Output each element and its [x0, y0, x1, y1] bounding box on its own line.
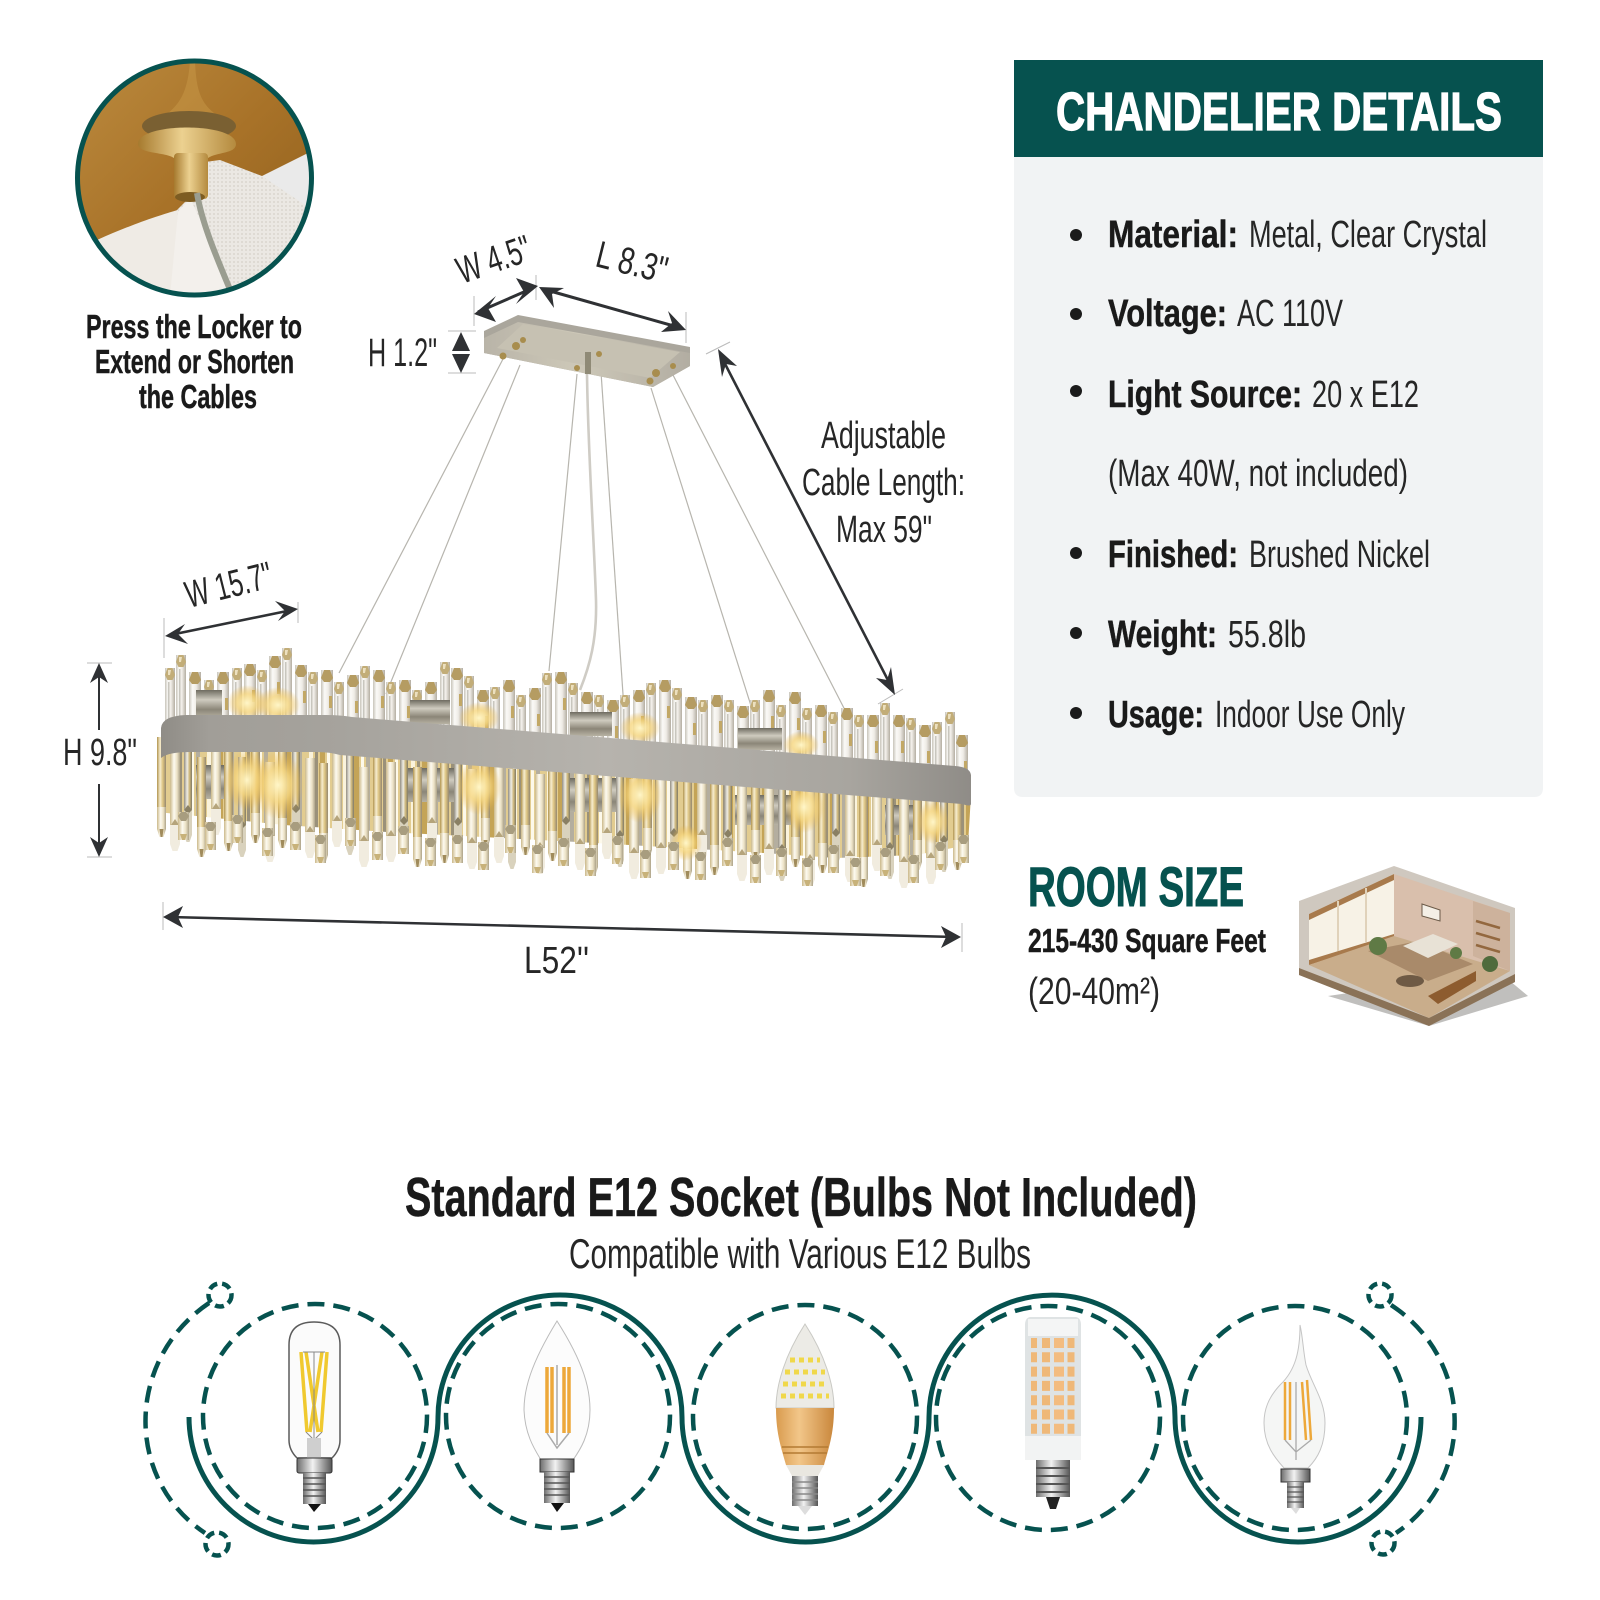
room size text: 215-430 Square Feet — [1028, 922, 1266, 959]
dimension: W 4.5 — [451, 228, 538, 326]
bullet list: Finished: — [1108, 534, 1238, 576]
bullet list: 20 x E12 — [1312, 374, 1419, 416]
nickel drums below band — [196, 765, 919, 835]
photo: cable locker detail — [78, 60, 318, 300]
caption: press the locker: Extend or Shorten — [95, 343, 294, 380]
dimension: L52 — [163, 902, 962, 982]
room size text: ROOM SIZE — [1028, 855, 1244, 918]
label: adjustable cable length: Max 59" — [836, 509, 932, 551]
dimension: L 8.3 — [539, 234, 686, 343]
lower lights — [225, 750, 949, 861]
bullet list: 55.8lb — [1228, 614, 1306, 656]
bullet list: Brushed Nickel — [1249, 534, 1430, 576]
caption: press the locker: the Cables — [139, 378, 257, 415]
dimension: W 4.5: W 4.5" — [451, 228, 537, 293]
label: adjustable cable length: Adjustable — [821, 415, 946, 457]
icon: flame-tip bulb — [1264, 1325, 1325, 1514]
panel header bar — [1014, 60, 1543, 157]
icon: tubular T6 bulb — [289, 1322, 340, 1512]
chandelier — [157, 648, 971, 888]
caption: press the locker — [86, 308, 302, 415]
icon: corn LED bulb — [1025, 1317, 1081, 1509]
room size text — [1028, 855, 1266, 1013]
bullet list: Material: — [1108, 214, 1238, 256]
chandelier canopy — [484, 315, 690, 387]
crystals below band — [157, 735, 962, 888]
bullet list: Indoor Use Only — [1215, 694, 1405, 736]
metal band — [161, 715, 971, 806]
bullet list: Voltage: — [1108, 293, 1227, 335]
panel background — [1014, 157, 1543, 797]
icon: clear candle bulb — [524, 1321, 590, 1512]
icon: isometric room — [1299, 866, 1528, 1026]
dimension: H 9.8 — [63, 663, 137, 857]
panel: chandelier details — [1014, 60, 1543, 797]
bullet list — [1070, 214, 1487, 736]
caption: press the locker: Press the Locker to — [86, 308, 302, 345]
upper nickel drums and lights — [196, 685, 819, 759]
dimension: W 15.7 — [164, 555, 298, 658]
dimension: W 15.7: W 15.7" — [181, 555, 277, 617]
crystal tips — [178, 812, 969, 886]
subheading: compatible bulbs: Compatible with Various E12 Bulbs — [569, 1230, 1031, 1277]
decorative bulb ring frame — [145, 1284, 1455, 1556]
room size text: (20-40m²) — [1028, 971, 1160, 1013]
bullet list: (Max 40W, not included) — [1108, 453, 1408, 495]
heading: standard E12 socket: Standard E12 Socket (Bulbs Not Included) — [405, 1166, 1197, 1228]
bullet list: Usage: — [1108, 694, 1204, 736]
dimension: H 1.2: H 1.2" — [368, 331, 437, 375]
chandelier cables — [339, 359, 847, 714]
bullet list: Metal, Clear Crystal — [1249, 214, 1487, 256]
dimension: L52: L52'' — [524, 940, 589, 982]
bullet list: AC 110V — [1237, 293, 1343, 335]
icon: gold LED candle bulb — [776, 1324, 834, 1515]
dimension: H 9.8: H 9.8" — [63, 732, 137, 774]
label: adjustable cable length — [802, 415, 965, 551]
bullet list: Light Source: — [1108, 374, 1302, 416]
bullet list: Weight: — [1108, 614, 1217, 656]
label: adjustable cable length: Cable Length: — [802, 462, 965, 504]
crystals above band — [165, 648, 968, 845]
skirt backing — [157, 745, 971, 858]
dimension: L 8.3: L 8.3" — [592, 234, 672, 292]
dimension: adjustable cable length arrow — [706, 342, 903, 704]
